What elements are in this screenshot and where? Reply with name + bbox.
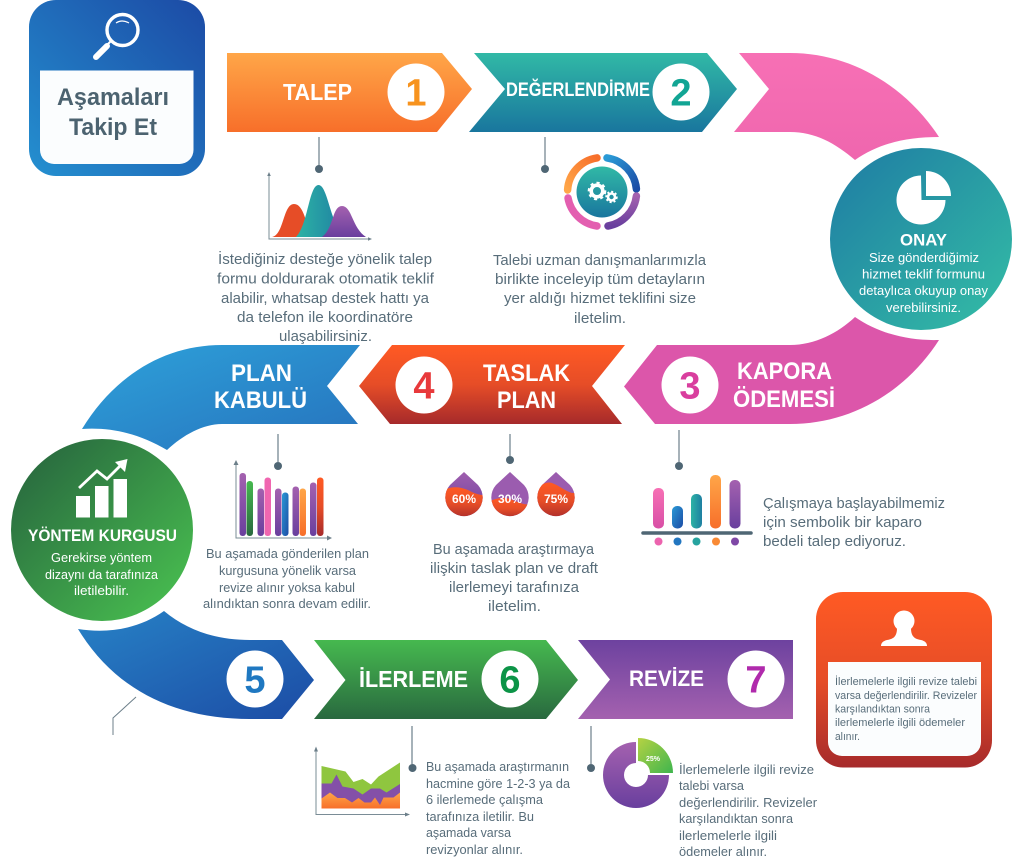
arrow: step 1 talep: [227, 53, 472, 132]
text: taslak plan description: Bu aşamada araştırmaya: [433, 542, 595, 558]
arrow: step 7 revize: [578, 640, 793, 719]
arrow: step 1 talep: 1: [405, 72, 427, 114]
panel: red person card: karşılandıktan sonra: [835, 704, 931, 716]
text: plan kabulü description: revize alınır yoksa kabul: [219, 580, 355, 595]
text: değerlendirme description: [493, 253, 707, 327]
text: değerlendirme description: birlikte inceleyip tüm detayların: [495, 272, 705, 288]
arrow: step 3 kapora ödemesi: 3: [679, 366, 701, 408]
text: revize description: talebi varsa: [679, 778, 745, 793]
circle: yöntem kurgusu: Gerekirse yöntem: [51, 550, 152, 565]
text: kapora description: için sembolik bir kaparo: [763, 515, 922, 531]
text: kapora description: bedeli talep ediyoruz.: [763, 534, 906, 550]
text: ilerleme description: aşamada varsa: [426, 825, 512, 840]
chart: revize donut: 25%: [646, 756, 661, 763]
arrow: plan kabulü: KABULÜ: [214, 387, 307, 414]
icon: magnifier: [96, 14, 138, 57]
text: talep description: formu doldurarak otomatik teklif: [217, 272, 435, 288]
icon: growth chart: [76, 459, 128, 518]
arrow: step 7 revize: 7: [745, 660, 767, 702]
arrow: step 3 kapora ödemesi: [624, 317, 939, 424]
arrow: step 4 taslak plan: TASLAK: [483, 360, 571, 387]
text: talep description: alabilir, whatsap destek hattı ya: [221, 291, 430, 307]
text: kapora description: Çalışmaya başlayabilmemiz: [763, 496, 945, 512]
circle: yöntem kurgusu: YÖNTEM KURGUSU: [28, 526, 177, 545]
chart: percentage drops: 75%: [544, 492, 568, 506]
chart: kapora bars: [643, 430, 751, 546]
text: talep description: [217, 250, 435, 345]
circle: onay: [830, 148, 1012, 330]
panel: red person card: ilerlemelerle ilgili ödemeler: [835, 717, 965, 729]
chart: revize donut: [587, 726, 673, 808]
text: taslak plan description: [430, 542, 598, 615]
arrow: step 5: [78, 611, 314, 719]
chart: talep bell curves: [267, 137, 372, 241]
arrow: step 4 taslak plan: [359, 345, 625, 424]
circle: onay: hizmet teklif formunu: [862, 266, 985, 282]
icon: person: [881, 610, 927, 646]
text: plan kabulü description: alındıktan sonra devam edilir.: [203, 596, 371, 611]
heading: Aşamaları Takip Et: [57, 84, 169, 141]
text: talep description: da telefon ile koordinatöre: [237, 310, 413, 326]
arrow: step 6 ilerleme: 6: [499, 660, 521, 702]
text: talep description: İstediğiniz desteğe yönelik talep: [218, 250, 432, 268]
arrow: step 6 ilerleme: [314, 640, 578, 719]
chart: percentage drops: 60%: [452, 492, 476, 506]
text: ilerleme description: 6 ilerlemede çalışma: [426, 792, 544, 807]
arrow: step 3 kapora ödemesi: KAPORA: [737, 358, 832, 385]
arrow: step 6 ilerleme: İLERLEME: [359, 666, 468, 692]
arrow: step 1 talep: TALEP: [283, 79, 352, 105]
chart: percentage drops: [445, 434, 575, 516]
icon: pie: [896, 171, 951, 224]
panel: red person card: alınır.: [835, 731, 860, 743]
text: taslak plan description: ilişkin taslak plan ve draft: [430, 561, 598, 577]
arrow: step 2 değerlendirme: [469, 53, 737, 132]
arrow: step 4 taslak plan: 4: [413, 366, 435, 408]
text: talep description: ulaşabilirsiniz.: [279, 329, 372, 345]
arrow: step 7 revize: REVİZE: [629, 666, 704, 691]
text: revize description: ilerlemelerle ilgili: [679, 828, 777, 843]
chart: plan kabulü bars: [234, 434, 332, 540]
arrow: plan kabulü: [82, 345, 360, 450]
panel: red person card: varsa değerlendirilir. Revizeler: [835, 690, 977, 702]
circle: onay: Size gönderdiğimiz: [869, 250, 979, 265]
icon: gears ring: [541, 137, 636, 226]
arrow: step 2 değerlendirme: DEĞERLENDİRME: [506, 79, 650, 101]
circle: onay: detaylıca okuyup onay: [859, 283, 988, 298]
panel: red person card: [816, 592, 992, 768]
panel: red person card: İlerlemelerle ilgili revize talebi: [835, 675, 977, 688]
chart: ilerleme area: [314, 726, 416, 816]
heading: Aşamaları Takip Et: Takip Et: [69, 114, 157, 141]
panel: search box: [29, 0, 205, 176]
circle: yöntem kurgusu: [11, 439, 193, 621]
text: revize description: karşılandıktan sonra: [679, 811, 794, 826]
arrow: step 3 kapora ödemesi: ÖDEMESİ: [733, 386, 835, 413]
arrow: plan kabulü: PLAN: [231, 360, 292, 387]
text: plan kabulü description: kurgusuna yönelik varsa: [219, 563, 357, 578]
text: değerlendirme description: Talebi uzman danışmanlarımızla: [493, 253, 707, 269]
text: ilerleme description: [426, 759, 571, 857]
heading: Aşamaları Takip Et: Aşamaları: [57, 84, 169, 111]
arrow: step 2 değerlendirme: 2: [670, 72, 692, 114]
text: ilerleme description: hacmine göre 1-2-3 ya da: [426, 776, 571, 791]
chart: percentage drops: 30%: [498, 492, 522, 506]
arrow: step 4 taslak plan: PLAN: [497, 387, 556, 414]
text: ilerleme description: revizyonlar alınır.: [426, 842, 523, 857]
text: revize description: İlerlemelerle ilgili revize: [679, 762, 814, 777]
text: taslak plan description: ilerlemeyi tarafınıza: [449, 580, 580, 596]
circle: onay: ONAY: [900, 232, 947, 250]
text: ilerleme description: Bu aşamada araştırmanın: [426, 759, 569, 774]
text: plan kabulü description: Bu aşamada gönderilen plan: [206, 546, 369, 561]
arrow: step 5: 5: [244, 660, 266, 702]
circle: yöntem kurgusu: iletilebilir.: [74, 583, 129, 598]
text: ilerleme description: tarafınıza iletilir. Bu: [426, 809, 534, 824]
text: taslak plan description: iletelim.: [488, 599, 541, 615]
text: revize description: [679, 762, 818, 857]
text: değerlendirme description: iletelim.: [574, 311, 626, 327]
text: değerlendirme description: yer aldığı hizmet teklifini size: [504, 291, 696, 307]
arrow: pink curve to onay: [734, 53, 939, 160]
text: plan kabulü description: [203, 546, 371, 611]
circle: yöntem kurgusu: dizaynı da tarafınıza: [45, 567, 159, 582]
text: revize description: değerlendirilir. Revizeler: [679, 795, 818, 810]
text: kapora description: [763, 496, 945, 550]
circle: onay: verebilirsiniz.: [886, 300, 961, 315]
